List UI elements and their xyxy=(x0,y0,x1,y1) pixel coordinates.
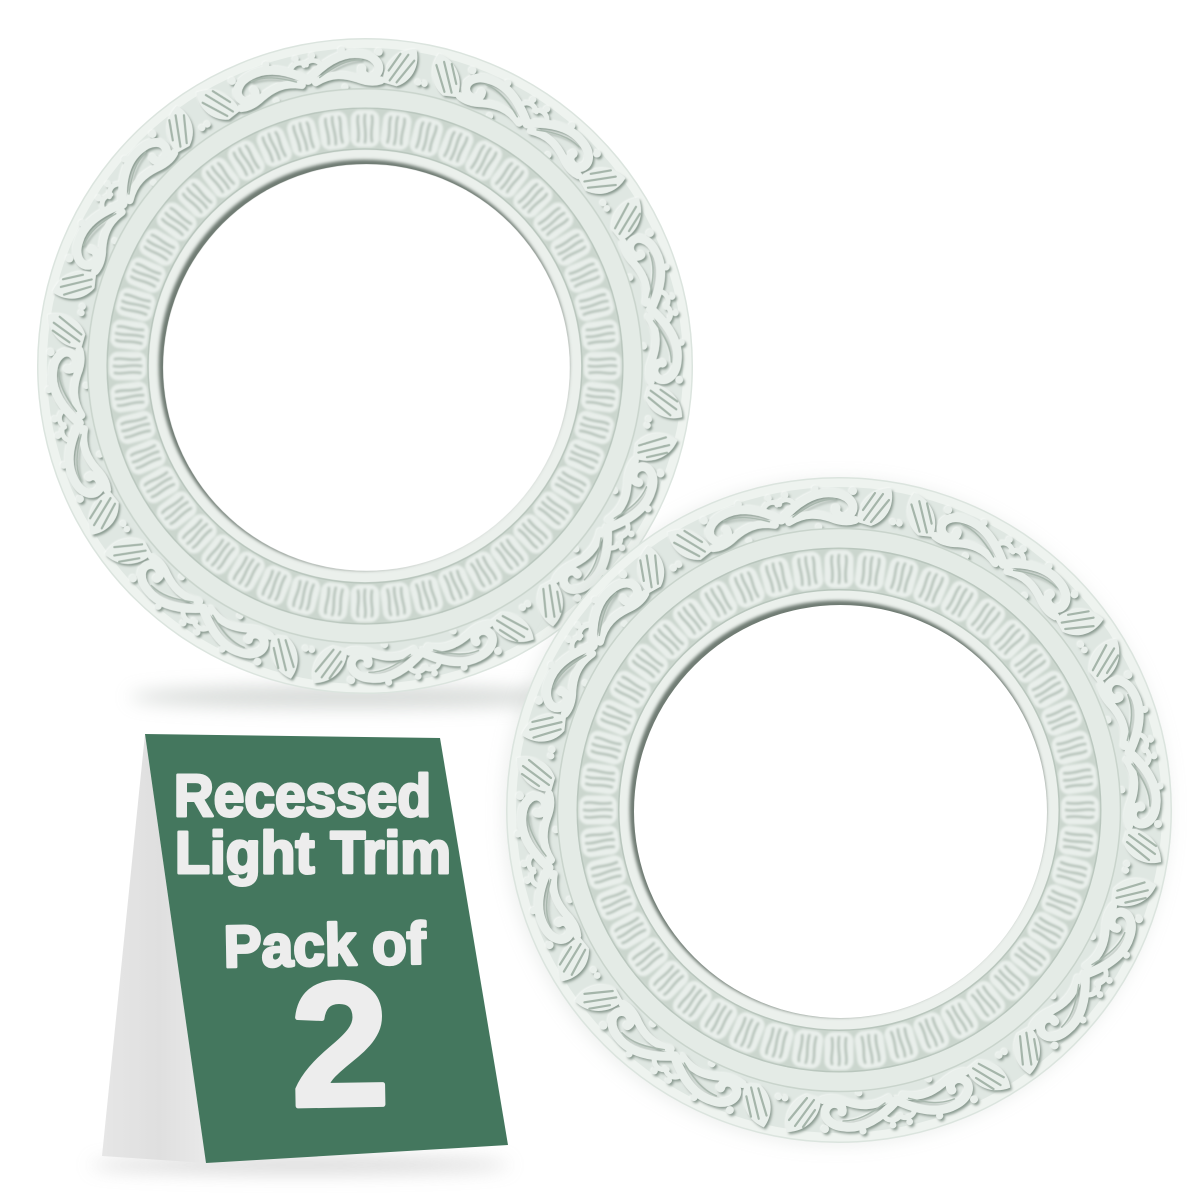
card side panel xyxy=(102,734,206,1163)
shadow under first ring xyxy=(130,686,570,708)
shadow under tent card xyxy=(90,1157,510,1173)
card green front xyxy=(145,734,508,1163)
shadow cast by second ring xyxy=(505,481,1167,1143)
text: Recessed: Recessed xyxy=(174,763,431,829)
ring: upper-left ceiling trim xyxy=(13,14,717,718)
text: Light Trim: Light Trim xyxy=(175,820,451,886)
text: 2: 2 xyxy=(289,946,391,1144)
ring: lower-right ceiling trim xyxy=(481,452,1197,1168)
text: Pack of: Pack of xyxy=(223,910,427,980)
tent card: Pack of 2 xyxy=(102,734,508,1163)
